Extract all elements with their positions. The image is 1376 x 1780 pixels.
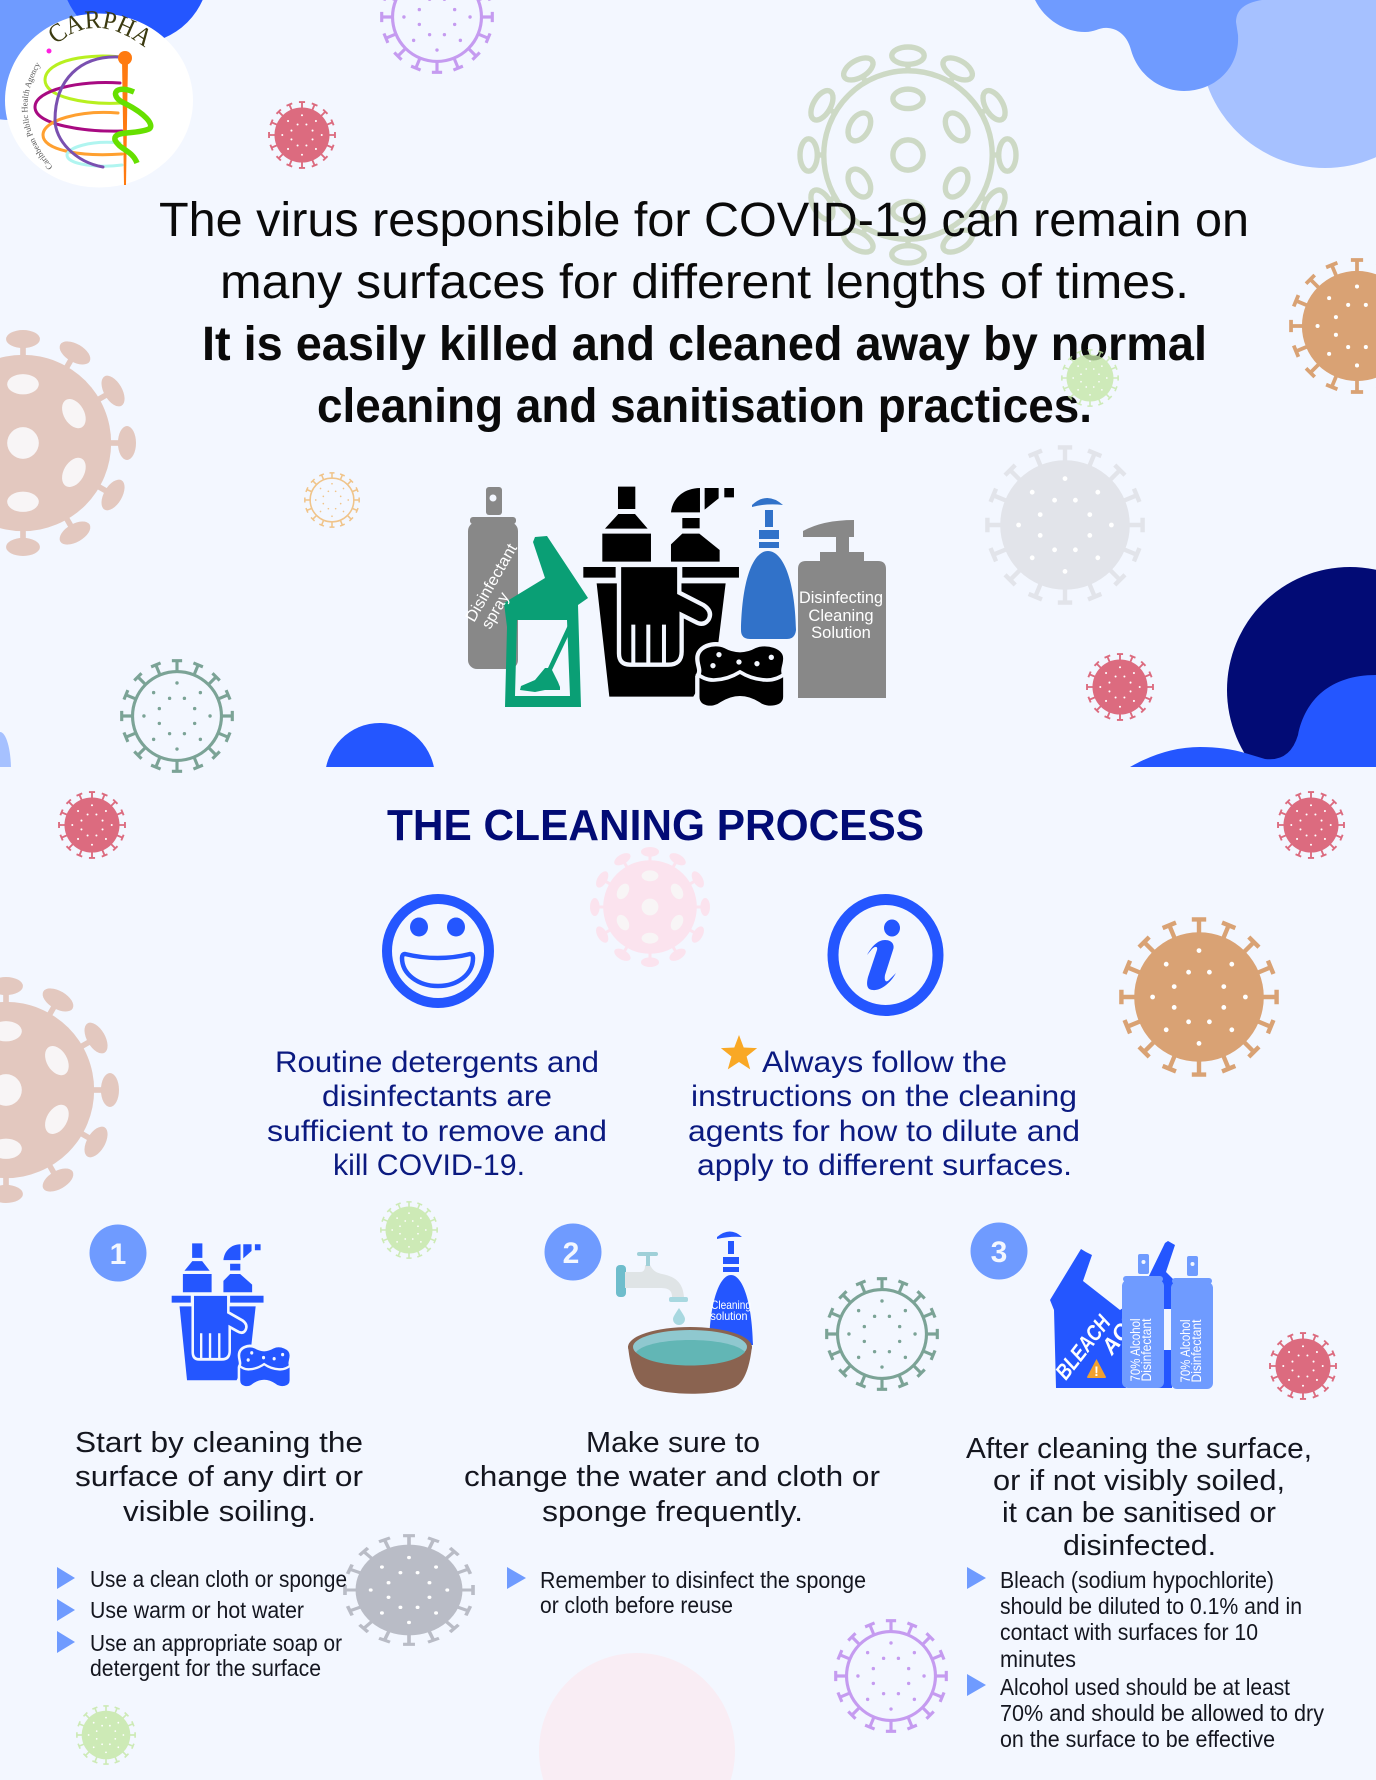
step 3 bullets: Bleach (sodium hypochlorite) — [1000, 1567, 1274, 1593]
blob: bottom pale pink circle — [539, 1653, 735, 1780]
soap label: solution — [710, 1309, 748, 1323]
step 1 badge — [90, 1224, 146, 1282]
warning sign — [1087, 1359, 1106, 1379]
step 3 bullets — [967, 1567, 1324, 1752]
virus: pale green bottom left — [77, 1706, 135, 1764]
title — [159, 194, 1249, 433]
virus: pink right lower — [1270, 1333, 1336, 1399]
virus: pale green middle — [381, 1202, 437, 1258]
virus: pink right — [1087, 654, 1153, 720]
logo snake — [115, 89, 151, 163]
text: always follow instructions: agents for how to dilute and — [688, 1115, 1080, 1148]
step 1 bullets — [57, 1566, 347, 1681]
grey dispenser label — [799, 589, 883, 642]
grey dispenser label: Solution — [811, 624, 871, 642]
step 1 bullets: Use a clean cloth or sponge — [90, 1566, 347, 1592]
step 3 heading: After cleaning the surface, — [966, 1433, 1312, 1465]
virus: orange right large — [1121, 919, 1277, 1075]
bleach labels: BLEACH — [1050, 1310, 1116, 1384]
logo agency name: Caribbean Public Health Agency — [22, 62, 52, 170]
alcohol can 2 label — [1178, 1319, 1204, 1382]
step 1 heading: Start by cleaning the — [75, 1427, 363, 1459]
alcohol can 2 — [1171, 1256, 1213, 1389]
logo rings — [35, 56, 128, 167]
step 1 heading: surface of any dirt or — [75, 1461, 363, 1493]
step 3 bullets: contact with surfaces for 10 — [1000, 1619, 1258, 1645]
second bleach bottle — [1148, 1241, 1175, 1388]
bowl — [628, 1346, 752, 1394]
icon: star — [721, 1035, 757, 1069]
aerosol label: spray — [479, 590, 513, 632]
bucket of cleaners — [583, 487, 785, 708]
grey dispenser label: Cleaning — [808, 607, 874, 625]
text: routine detergents: sufficient to remove and — [267, 1115, 607, 1148]
blob: top right blue — [1035, 0, 1300, 91]
blob: top left blue — [61, 0, 209, 44]
icon: information — [833, 900, 938, 1010]
text: routine detergents: kill COVID-19. — [333, 1149, 525, 1182]
alcohol can 1 label: 70% Alcohol — [1128, 1318, 1143, 1382]
step 3 bullets: Alcohol used should be at least — [1000, 1674, 1291, 1700]
alcohol can 1 — [1122, 1254, 1164, 1388]
blob: top right pale overlay — [1236, 0, 1376, 60]
step 1 badge: 1 — [110, 1238, 126, 1271]
logo disc — [5, 14, 193, 188]
logo name: CARPHA — [50, 11, 148, 48]
icon: bleach and alcohol bottles — [1050, 1241, 1213, 1389]
virus: teal outline — [122, 661, 232, 771]
heading: the cleaning process: THE CLEANING PROCESS — [387, 801, 924, 850]
logo: CARPHA — [5, 11, 193, 188]
text: always follow instructions: Always follow the — [762, 1046, 1007, 1079]
text: always follow instructions — [688, 1046, 1080, 1182]
virus: pale green over title — [1062, 350, 1118, 406]
alcohol can 1 label: Disinfectant — [1139, 1318, 1154, 1382]
blob: bottom centre semicircle — [325, 723, 435, 833]
virus: purple outline bottom — [836, 1621, 946, 1731]
virus: pale pink centre — [590, 847, 710, 967]
grey dispenser label: Disinfecting — [799, 589, 883, 607]
step 3 badge — [970, 1222, 1028, 1280]
step 2 badge — [544, 1224, 602, 1280]
step 1 heading: visible soiling. — [123, 1496, 316, 1528]
step 3 bullets: 70% and should be allowed to dry — [1000, 1700, 1324, 1726]
title line 3: It is easily killed and cleaned away by normal — [202, 318, 1207, 371]
icon: bleach and alcohol bottles: ACH — [1096, 1305, 1146, 1360]
warning sign: ! — [1094, 1363, 1099, 1379]
virus: grey bottom — [345, 1536, 473, 1644]
text: always follow instructions: apply to different surfaces. — [697, 1149, 1072, 1182]
virus: teal outline middle — [827, 1279, 937, 1389]
title line 4: cleaning and sanitisation practices. — [317, 380, 1092, 433]
virus: pink near logo — [269, 102, 335, 168]
step 3 bullets: minutes — [1000, 1646, 1076, 1672]
blue soap dispenser — [741, 498, 796, 639]
alcohol can 1 label — [1128, 1318, 1154, 1382]
text: always follow instructions: instructions on the cleaning — [691, 1080, 1077, 1113]
bleach bottle — [1050, 1249, 1126, 1388]
virus: pink upper right — [1278, 792, 1344, 858]
step 2 bullets: or cloth before reuse — [540, 1592, 733, 1618]
step 3 heading: it can be sanitised or — [1002, 1497, 1276, 1529]
aerosol can — [468, 487, 518, 669]
step 2 bullets: Remember to disinfect the sponge — [540, 1567, 866, 1593]
step 3 bullets: should be diluted to 0.1% and in — [1000, 1593, 1302, 1619]
step 2 heading: sponge frequently. — [542, 1496, 803, 1528]
title line 1: The virus responsible for COVID-19 can remain on — [159, 194, 1249, 247]
soap label — [710, 1298, 751, 1323]
soap label: Cleaning — [711, 1298, 751, 1312]
text: routine detergents: Routine detergents and — [275, 1046, 599, 1079]
step 2 heading: change the water and cloth or — [464, 1461, 880, 1493]
blob: left edge sliver — [0, 732, 11, 808]
step 2 badge: 2 — [563, 1237, 579, 1270]
green bottle with mop — [504, 536, 588, 707]
text: routine detergents: disinfectants are — [322, 1080, 552, 1113]
virus: pale grey — [987, 447, 1143, 603]
virus: pale orange outline — [305, 473, 359, 527]
illustration: cleaning products — [463, 487, 886, 708]
virus: purple outline top — [382, 0, 492, 72]
step 1 bullets: detergent for the surface — [90, 1655, 321, 1681]
step 3 heading: disinfected. — [1063, 1530, 1216, 1562]
blob: top left light blue — [0, 0, 90, 120]
step 1 heading — [75, 1427, 363, 1528]
mop — [520, 625, 572, 692]
blob: top right pale blue — [1200, 0, 1376, 168]
step 3 heading: or if not visibly soiled, — [993, 1465, 1285, 1497]
step 2 heading: Make sure to — [586, 1427, 760, 1459]
step 1 bullets: Use an appropriate soap or — [90, 1630, 342, 1656]
aerosol label: Disinfectant — [463, 541, 521, 625]
title line 2: many surfaces for different lengths of times. — [220, 256, 1189, 309]
faucet — [616, 1252, 688, 1325]
virus: beige left — [0, 330, 136, 556]
icon: faucet, soap and bowl — [616, 1232, 753, 1394]
virus: pale green large outline — [800, 47, 1016, 263]
step 1 bullets: Use warm or hot water — [90, 1597, 304, 1623]
icon: smiley face — [387, 899, 489, 1003]
blob: bottom right navy — [1227, 567, 1376, 813]
step 2 heading — [464, 1427, 880, 1528]
alcohol can 2 label: 70% Alcohol — [1178, 1320, 1193, 1382]
blob: bottom right blue — [1130, 675, 1376, 790]
step 2 bullets — [507, 1567, 866, 1618]
step 3 badge: 3 — [991, 1236, 1007, 1269]
text: routine detergents — [267, 1046, 607, 1182]
icon: blue bucket of cleaners — [172, 1243, 291, 1387]
alcohol can 2 label: Disinfectant — [1189, 1319, 1204, 1382]
step 3 bullets: on the surface to be effective — [1000, 1726, 1275, 1752]
step 3 heading — [966, 1433, 1312, 1562]
virus: beige left lower — [0, 977, 119, 1203]
virus: orange right edge — [1291, 260, 1376, 392]
grey dispenser — [798, 520, 886, 698]
lower section background — [0, 767, 1376, 1780]
soap bottle — [709, 1232, 753, 1345]
virus: pink upper left — [59, 792, 125, 858]
logo staff — [122, 60, 128, 185]
